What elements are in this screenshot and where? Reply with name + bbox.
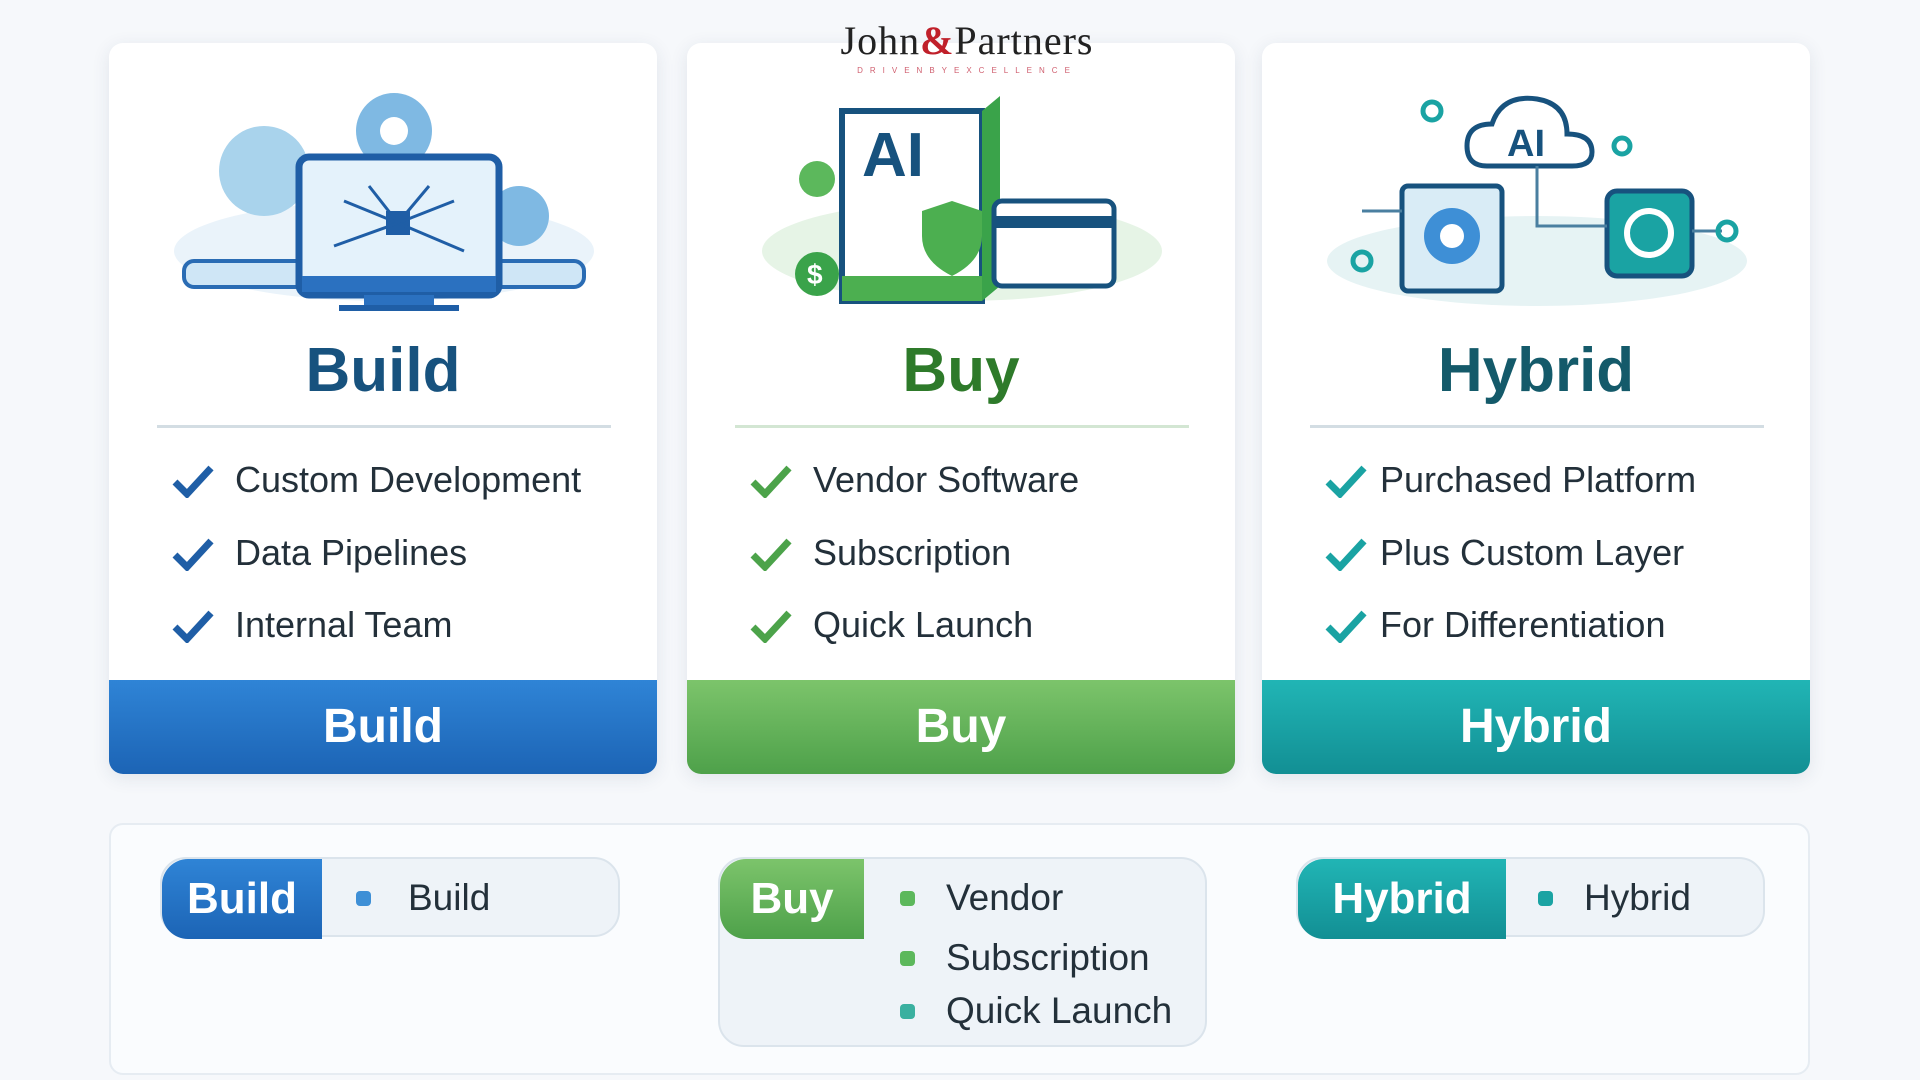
list: buy items: Vendor Software: [813, 459, 1079, 500]
logo: John&Partners: [840, 18, 1093, 63]
pill: buy: [718, 857, 1207, 1047]
bar: build: Build: [323, 700, 443, 753]
pill: hybrid: [1296, 857, 1765, 937]
list: hybrid items: [1326, 459, 1696, 645]
pill: buy: Subscription: [946, 937, 1150, 978]
list: build items: Data Pipelines: [235, 532, 467, 573]
panel: summary: [109, 823, 1810, 1075]
heading: hybrid: Hybrid: [1438, 336, 1634, 405]
bar: buy: [687, 680, 1235, 774]
pill: buy: Quick Launch: [946, 990, 1172, 1031]
icon: AI cloud hybrid: AI: [1507, 123, 1545, 165]
heading: buy: Buy: [902, 336, 1020, 405]
list: buy items: Subscription: [813, 532, 1011, 573]
list: build items: Internal Team: [235, 604, 452, 645]
bar: build: [109, 680, 657, 774]
heading: build: Build: [306, 336, 460, 405]
list: build items: [172, 459, 581, 645]
icon: AI box: AI: [862, 121, 924, 190]
logo: DRIVENBYEXCELLENCE: [857, 66, 1077, 75]
list: hybrid items: For Differentiation: [1380, 604, 1665, 645]
list: hybrid items: Plus Custom Layer: [1380, 532, 1684, 573]
list: build items: Custom Development: [235, 459, 581, 500]
panel: build: [109, 43, 657, 774]
pill: buy: Vendor: [946, 877, 1063, 918]
icon: AI cloud hybrid: [1327, 96, 1747, 306]
pill: build: Build: [408, 877, 490, 918]
bar: hybrid: [1262, 680, 1810, 774]
list: buy items: Quick Launch: [813, 604, 1033, 645]
list: buy items: [750, 459, 1079, 645]
pill: build: Build: [187, 874, 297, 923]
pill: hybrid: Hybrid: [1584, 877, 1691, 918]
bar: hybrid: Hybrid: [1460, 700, 1612, 753]
pill: buy: Buy: [750, 874, 834, 923]
bar: buy: Buy: [916, 700, 1006, 753]
panel: buy: [687, 43, 1235, 774]
icon: AI box: [762, 96, 1162, 304]
icon: computer with gears: [174, 93, 594, 311]
list: hybrid items: Purchased Platform: [1380, 459, 1696, 500]
panel: hybrid: [1262, 43, 1810, 774]
pill: build: [160, 857, 620, 937]
pill: hybrid: Hybrid: [1332, 874, 1472, 923]
icon: AI box: $: [807, 259, 823, 290]
